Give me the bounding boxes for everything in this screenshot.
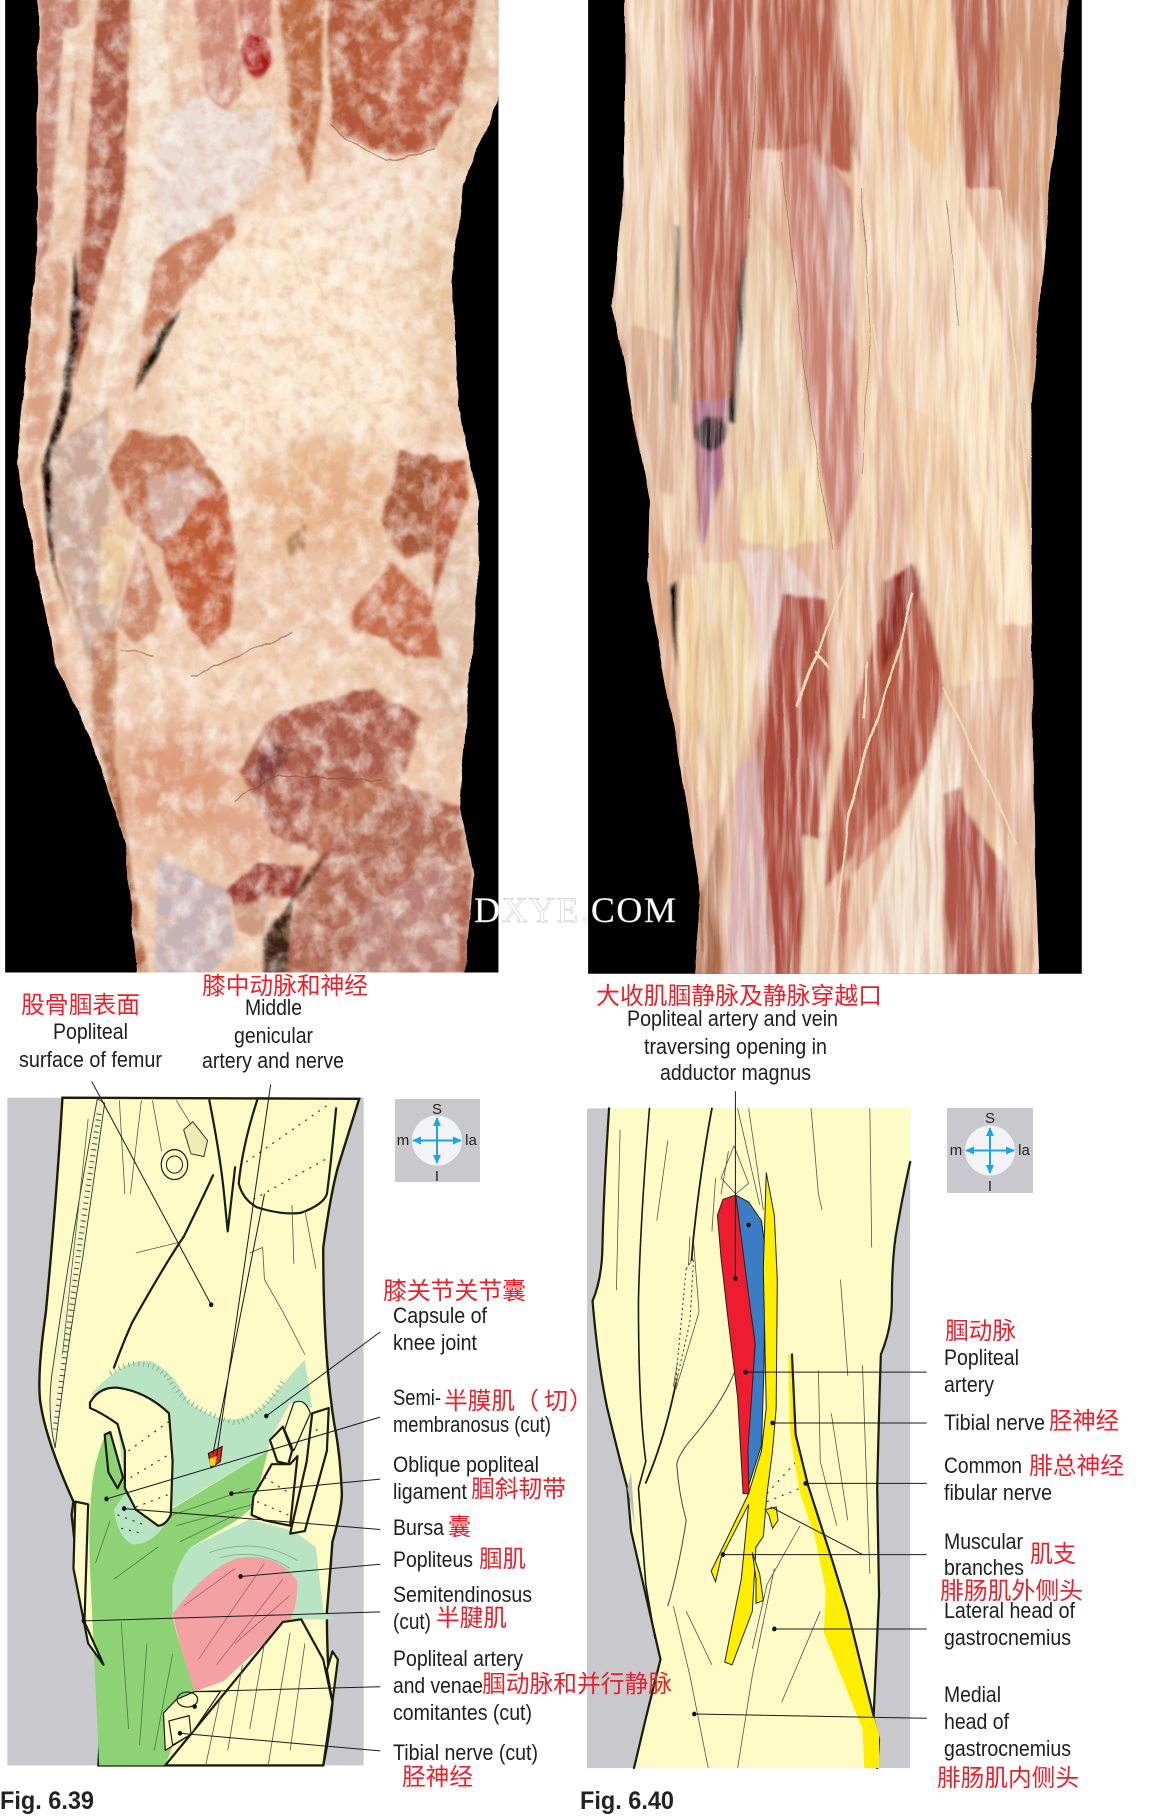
label: lateral head of gastrocnemius: [940, 1578, 1083, 1650]
limb outline: [39, 1098, 359, 1765]
compass: Fig. 6.39 orientation: la: [465, 1132, 477, 1149]
photo: dissection of popliteal fossa, superficial: [5, 0, 514, 1025]
label: tibial nerve (cut): [393, 1740, 538, 1791]
semitendinosus: [173, 1557, 298, 1692]
label: common fibular nerve: Common: [944, 1453, 1022, 1478]
label: popliteal artery: artery: [944, 1372, 994, 1397]
common fibular nerve, yellow: [788, 1354, 879, 1768]
label: bursa: Bursa: [393, 1515, 445, 1540]
compass: Fig. 6.40 orientation: m: [950, 1142, 962, 1159]
label: popliteal artery: [944, 1318, 1019, 1397]
label: middle genicular artery and nerve: 膝中动脉和神经: [202, 973, 368, 1000]
label: tibial nerve (cut): Tibial nerve (cut): [393, 1740, 538, 1765]
label: capsule of knee joint: 膝关节关节囊: [383, 1278, 526, 1305]
label: oblique popliteal ligament: Oblique popliteal: [393, 1452, 539, 1477]
label: capsule of knee joint: [383, 1278, 526, 1355]
label: muscular branches: 肌支: [1030, 1541, 1076, 1568]
label: semitendinosus (cut): Semitendinosus: [393, 1582, 532, 1607]
label: popliteal artery and vein traversing opening in adductor magnus: traversing opening in: [644, 1034, 827, 1059]
cut vessels: [163, 1692, 220, 1750]
label: tibial nerve (cut): 胫神经: [402, 1764, 473, 1791]
label: bursa: [393, 1514, 471, 1541]
label: semitendinosus (cut): (cut): [393, 1609, 431, 1634]
label: oblique popliteal ligament: ligament: [393, 1479, 467, 1504]
label: popliteus: Popliteus: [393, 1547, 473, 1572]
label: common fibular nerve: fibular nerve: [944, 1480, 1052, 1505]
stippled band on left edge: [50, 1099, 105, 1448]
label: popliteal artery and venae comitantes (cut): and venae: [393, 1673, 483, 1698]
compass: Fig. 6.40 orientation: la: [1018, 1142, 1030, 1159]
label: popliteal artery and venae comitantes (cut): Popliteal artery: [393, 1646, 523, 1671]
label: popliteal artery and venae comitantes (cut): 腘动脉和并行静脉: [482, 1671, 672, 1698]
label: popliteal artery and venae comitantes (cut): comitantes (cut): [393, 1700, 532, 1725]
compass: Fig. 6.39 orientation: I: [435, 1168, 439, 1185]
bursa: [114, 1494, 163, 1544]
compass: Fig. 6.40 orientation: [947, 1108, 1033, 1195]
label: medial head of gastrocnemius: [937, 1682, 1079, 1792]
cut bones: [90, 1388, 173, 1526]
label: semimembranosus (cut): 半膜肌: [444, 1388, 515, 1415]
label: popliteus: [393, 1546, 526, 1573]
label: semimembranosus (cut): （: [515, 1388, 539, 1415]
label: popliteal artery and vein traversing opening in adductor magnus: adductor magnus: [660, 1060, 811, 1085]
label: popliteal artery and vein traversing opening in adductor magnus: [596, 983, 882, 1085]
tibial nerve, yellow: [711, 1173, 777, 1665]
label: medial head of gastrocnemius: gastrocnemius: [944, 1736, 1071, 1761]
limb outline: [593, 1108, 910, 1768]
label: tibial nerve: Tibial nerve: [944, 1410, 1045, 1435]
joint capsule: [92, 1360, 312, 1510]
label: popliteal surface of femur: surface of femur: [19, 1047, 162, 1072]
label: medial head of gastrocnemius: Medial: [944, 1682, 1001, 1707]
label: semitendinosus (cut): 半腱肌: [436, 1605, 507, 1632]
label: medial head of gastrocnemius: head of: [944, 1709, 1010, 1734]
label: popliteal surface of femur: Popliteal: [53, 1019, 128, 1044]
photo: dissection of popliteal vessels and nerves: [588, 0, 1082, 1025]
leader lines, Fig. 6.40: [692, 1091, 927, 1718]
label: common fibular nerve: [944, 1453, 1124, 1505]
panel: Fig. 6.40 diagram: [587, 1091, 927, 1768]
compass: Fig. 6.40 orientation: S: [985, 1110, 995, 1127]
label: tibial nerve: [944, 1408, 1119, 1435]
label: muscular branches: Muscular: [944, 1529, 1023, 1554]
watermark: DXYE.COM: DXYE.COM: [474, 890, 676, 930]
figure number: Fig. 6.40: Fig. 6.40: [580, 1787, 674, 1815]
oblique ligament, green: [89, 1432, 268, 1765]
label: middle genicular artery and nerve: Middle: [245, 995, 302, 1020]
middle genicular vessel: [208, 1447, 222, 1468]
label: popliteal surface of femur: [19, 992, 162, 1072]
label: bursa: 囊: [448, 1514, 471, 1541]
label: middle genicular artery and nerve: [202, 973, 368, 1073]
leader lines, Fig. 6.39: [82, 1082, 380, 1751]
label: lateral head of gastrocnemius: 腓肠肌外侧头: [940, 1578, 1083, 1605]
label: popliteus: 腘肌: [479, 1546, 526, 1573]
label: semimembranosus (cut): [393, 1385, 593, 1437]
label: popliteal artery: Popliteal: [944, 1345, 1019, 1370]
label: semimembranosus (cut): ）: [569, 1388, 593, 1415]
label: semimembranosus (cut): Semi-: [393, 1385, 441, 1410]
femur condyle and upper structures: [62, 1100, 336, 1368]
label: oblique popliteal ligament: 腘斜韧带: [471, 1476, 566, 1503]
panel: Fig. 6.39 diagram: [7, 1082, 380, 1765]
label: muscular branches: branches: [944, 1555, 1024, 1580]
popliteal artery, red: [717, 1195, 755, 1494]
label: common fibular nerve: 腓总神经: [1029, 1453, 1124, 1480]
label: lateral head of gastrocnemius: gastrocnemius: [944, 1625, 1071, 1650]
lower wedge: [165, 1619, 332, 1765]
label: popliteal artery and vein traversing opening in adductor magnus: Popliteal artery and vein: [627, 1006, 838, 1031]
popliteal vein, blue: [736, 1195, 765, 1486]
label: semimembranosus (cut): membranosus (cut): [393, 1412, 551, 1437]
label: capsule of knee joint: knee joint: [393, 1330, 477, 1355]
label: popliteal artery and venae comitantes (cut): [393, 1646, 672, 1725]
label: middle genicular artery and nerve: genicular: [234, 1023, 313, 1048]
label: tibial nerve: 胫神经: [1049, 1408, 1119, 1435]
label: popliteal artery: 腘动脉: [945, 1318, 1016, 1345]
compass: Fig. 6.39 orientation: m: [397, 1132, 409, 1149]
label: middle genicular artery and nerve: artery and nerve: [202, 1048, 344, 1073]
label: semitendinosus (cut): [393, 1582, 532, 1634]
label: medial head of gastrocnemius: 腓肠肌内侧头: [937, 1765, 1079, 1792]
label: lateral head of gastrocnemius: Lateral head of: [944, 1598, 1076, 1623]
compass: Fig. 6.40 orientation: I: [988, 1178, 992, 1195]
label: semimembranosus (cut): 切: [544, 1388, 568, 1415]
compass: Fig. 6.39 orientation: S: [432, 1101, 442, 1118]
label: popliteal surface of femur: 股骨腘表面: [21, 992, 140, 1019]
muscle and fascia lines: [616, 1108, 872, 1768]
label: muscular branches: [944, 1529, 1076, 1580]
label: capsule of knee joint: Capsule of: [393, 1303, 488, 1328]
label: oblique popliteal ligament: [393, 1452, 566, 1504]
compass: Fig. 6.39 orientation: [395, 1099, 480, 1185]
label: popliteal artery and vein traversing opening in adductor magnus: 大收肌腘静脉及静脉穿越口: [596, 983, 882, 1010]
figure number: Fig. 6.39: Fig. 6.39: [0, 1787, 94, 1815]
